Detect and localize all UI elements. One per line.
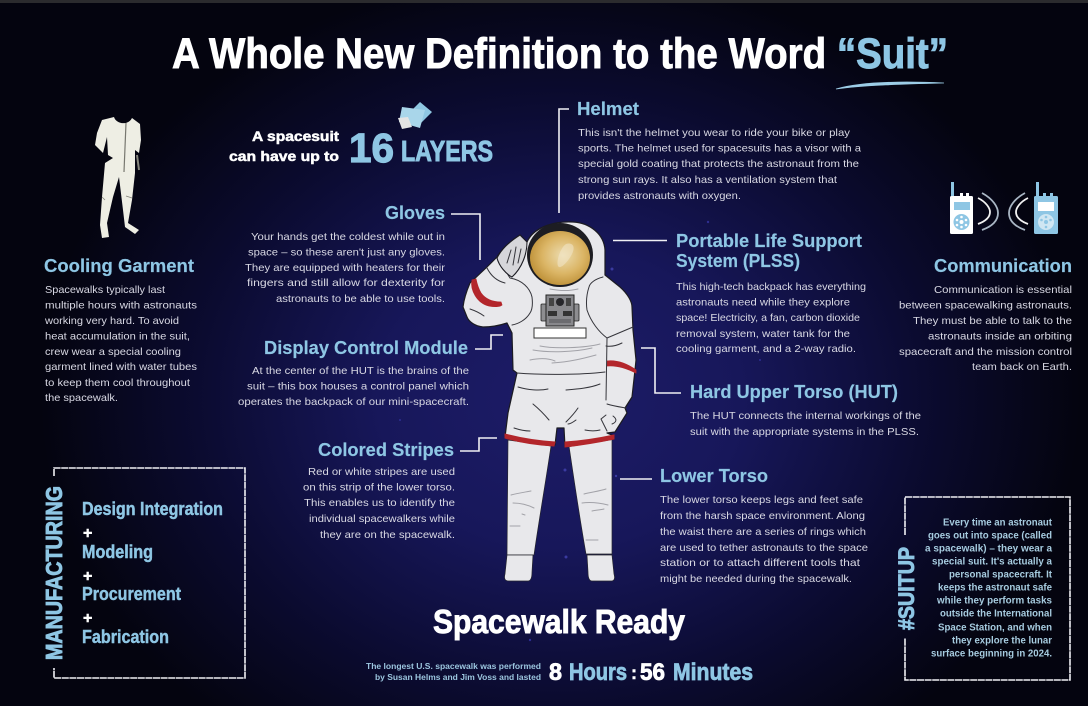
panel: helmet: special gold coating that protects the astronaut from the <box>578 158 859 170</box>
panel: suitup: #SUITUP <box>894 547 919 630</box>
panel: communication text: team back on Earth. <box>972 361 1072 373</box>
panel: gloves: space – so these aren't just any gloves. <box>248 246 445 258</box>
panel: helmet: This isn't the helmet you wear to ride your bike or play <box>578 127 851 139</box>
panel: suitup: outside the International <box>940 608 1052 620</box>
panel: gloves: Gloves <box>385 203 445 223</box>
name tag <box>534 328 586 338</box>
panel: suitup: they explore the lunar <box>952 636 1052 646</box>
panel: colored stripes: they are on the spacewalk. <box>320 529 455 541</box>
panel: hard upper torso <box>641 348 921 438</box>
panel: cooling garment text <box>44 256 197 404</box>
panel: gloves: fingers and still allow for dexterity for <box>247 277 446 289</box>
panel: gloves: Your hands get the coldest while out in <box>251 231 445 243</box>
panel: colored stripes: This enables us to identify the <box>304 497 455 509</box>
panel: suitup: a spacewalk) – they wear a <box>925 544 1052 554</box>
panel: cooling garment text: multiple hours with astronauts <box>45 300 197 312</box>
panel: cooling garment text: Cooling Garment <box>44 256 194 276</box>
panel: gloves <box>245 203 480 305</box>
panel: helmet: sports. The helmet used for spacesuits has a visor with a <box>578 142 861 154</box>
icon: cooling garment <box>95 117 141 238</box>
panel: colored stripes: Colored Stripes <box>318 440 454 460</box>
stat: longest spacewalk: : <box>631 663 637 683</box>
panel: communication text: spacecraft and the mission control <box>899 346 1072 358</box>
panel: communication text: They must be able to talk to the <box>913 315 1072 327</box>
stat: longest spacewalk: Minutes <box>673 659 753 686</box>
panel: communication text: between spacewalking astronauts. <box>899 300 1072 312</box>
panel: manufacturing: Modeling <box>82 542 153 562</box>
panel: portable life support system <box>613 231 866 355</box>
icon: radios <box>950 182 1058 234</box>
suit seams <box>487 257 633 400</box>
panel: portable life support system: cooling garment, and a 2-way radio. <box>676 343 856 355</box>
panel: cooling garment text: working very hard. To avoid <box>44 315 179 327</box>
panel: portable life support system: System (PLSS) <box>676 251 800 271</box>
panel: manufacturing <box>41 468 245 678</box>
panel: manufacturing: MANUFACTURING <box>41 486 67 660</box>
leg creases <box>510 489 608 540</box>
legs <box>507 440 551 555</box>
panel: portable life support system: This high-tech backpack has everything <box>676 281 866 293</box>
panel: lower torso: are used to tether astronauts to the space <box>660 542 868 554</box>
panel: communication text <box>899 256 1072 373</box>
panel: portable life support system: astronauts need while they explore <box>676 296 850 308</box>
stat: longest spacewalk: The longest U.S. spacewalk was performed <box>366 661 541 671</box>
panel: cooling garment text: the spacewalk. <box>45 392 118 404</box>
panel: helmet: provides astronauts with oxygen. <box>578 190 741 202</box>
display control module box <box>541 304 548 321</box>
panel: portable life support system: removal system, water tank for the <box>676 328 850 340</box>
panel: display control module: At the center of the HUT is the brains of the <box>252 365 469 377</box>
panel: communication text: Communication <box>934 256 1072 276</box>
suit silhouette: helmet shell, arms, torso and trunks <box>463 222 636 447</box>
panel: suitup: while they perform tasks <box>936 596 1052 606</box>
panel: hard upper torso: The HUT connects the internal workings of the <box>690 410 921 422</box>
stat: 16 layers: A spacesuit <box>252 128 339 144</box>
red waist stripes <box>505 434 555 446</box>
panel: suitup: special suit. It's actually a <box>932 556 1052 568</box>
panel: manufacturing: Fabrication <box>82 627 169 647</box>
panel: cooling garment text: Spacewalks typically last <box>45 284 165 296</box>
panel: hard upper torso: Hard Upper Torso (HUT) <box>690 382 898 402</box>
stat: 16 layers <box>229 102 493 171</box>
panel: helmet: Helmet <box>577 99 639 119</box>
panel: communication text: Communication is essential <box>934 284 1072 296</box>
panel: suitup: goes out into space (called <box>928 530 1052 542</box>
panel: cooling garment text: garment lined with water tubes <box>45 361 197 373</box>
glove, saluting hand <box>497 235 527 277</box>
panel: colored stripes: individual spacewalkers while <box>309 513 455 525</box>
panel: hard upper torso: suit with the appropriate systems in the PLSS. <box>690 426 919 438</box>
panel: display control module: operates the backpack of our mini-spacecraft. <box>238 396 469 408</box>
panel: suitup: keeps the astronaut safe <box>938 582 1052 594</box>
panel: lower torso: Lower Torso <box>660 466 768 486</box>
panel: helmet <box>559 99 861 213</box>
heading: spacewalk ready: Spacewalk Ready <box>433 603 686 640</box>
red arm stripes <box>472 279 502 307</box>
stat: 16 layers: 16 <box>349 125 394 171</box>
panel: communication text: astronauts inside an orbiting <box>928 330 1072 342</box>
boots <box>504 555 533 581</box>
stat: 16 layers: can have up to <box>229 148 339 164</box>
glove, right hand <box>601 404 626 431</box>
panel: lower torso: from the harsh space environment. Along <box>660 510 865 522</box>
panel: suitup: Every time an astronaut <box>943 518 1053 528</box>
underline swoosh <box>836 82 944 89</box>
panel: lower torso <box>620 466 868 585</box>
panel: cooling garment text: crew wear a special cooling <box>45 346 181 358</box>
panel: lower torso: station or to attach different tools that <box>660 557 860 569</box>
stat: longest spacewalk: by Susan Helms and Jim Voss and lasted <box>375 672 541 682</box>
helmet visor <box>527 223 593 287</box>
title: A Whole New Definition to the Word “Suit” <box>172 30 948 78</box>
panel: suitup <box>894 497 1070 680</box>
panel: manufacturing: + <box>83 525 92 542</box>
panel: suitup: personal spacecraft. It <box>949 570 1053 580</box>
panel: manufacturing: Design Integration <box>82 499 223 519</box>
panel: suitup: surface beginning in 2024. <box>931 648 1052 660</box>
panel: lower torso: might be needed during the spacewalk. <box>660 573 852 585</box>
panel: cooling garment text: to keep them cool throughout <box>45 377 190 389</box>
panel: cooling garment text: heat accumulation in the suit, <box>45 330 190 342</box>
panel: colored stripes <box>303 438 497 541</box>
panel: suitup: Space Station, and when <box>938 622 1052 634</box>
panel: manufacturing: + <box>83 568 92 585</box>
illustration: astronaut <box>463 222 636 581</box>
panel: lower torso: The lower torso keeps legs and feet safe <box>660 494 863 506</box>
panel: gloves: astronauts to be able to use tools. <box>276 293 445 305</box>
panel: colored stripes: Red or white stripes are used <box>308 466 455 478</box>
stat: longest spacewalk <box>366 659 753 686</box>
panel: portable life support system: Portable Life Support <box>676 231 862 251</box>
icon: layers <box>398 102 432 129</box>
panel: helmet: strong sun rays. It also has a ventilation system that <box>578 174 837 186</box>
stat: 16 layers: LAYERS <box>401 136 493 168</box>
panel: manufacturing: + <box>83 610 92 627</box>
panel: display control module: Display Control Module <box>264 338 468 358</box>
panel: lower torso: the waist there are a series of rings which <box>660 526 866 538</box>
panel: manufacturing: Procurement <box>82 584 181 604</box>
panel: display control module: suit – this box houses a control panel which <box>247 380 469 392</box>
stat: longest spacewalk: Hours <box>569 659 627 686</box>
panel: portable life support system: space! Electricity, a fan, carbon dioxide <box>676 312 860 324</box>
panel: display control module <box>238 335 503 408</box>
stat: longest spacewalk: 8 <box>549 659 562 686</box>
panel: colored stripes: on this strip of the lower torso. <box>303 482 455 494</box>
stat: longest spacewalk: 56 <box>640 659 665 686</box>
panel: gloves: They are equipped with heaters for their <box>245 262 446 274</box>
